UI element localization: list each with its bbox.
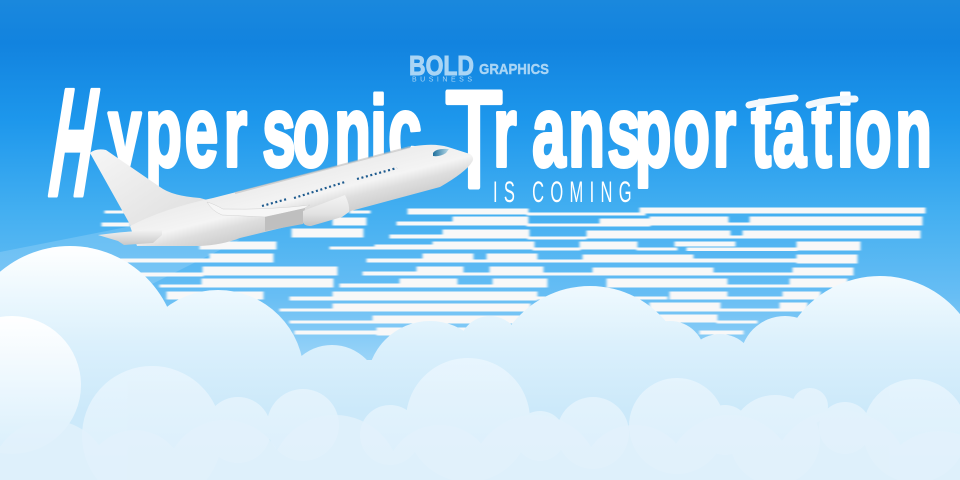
- contrail: [0, 226, 240, 330]
- subtitle: is coming: IS COMING: [493, 176, 632, 209]
- logo: Bold Business Graphics: BUSINESS: [412, 76, 472, 84]
- title: Hypersonic Transportation: H: [40, 58, 108, 228]
- wing: [207, 202, 310, 217]
- cabin windows: [262, 168, 397, 206]
- engine: [303, 195, 349, 226]
- title: Hypersonic Transportation: ransportation: [493, 76, 932, 188]
- tail fin: [90, 149, 225, 236]
- striped word behind the plane: [100, 208, 925, 335]
- cloud bank: back layer: [0, 246, 960, 480]
- airplane: [90, 145, 473, 246]
- logo: Bold Business Graphics: GRAPHICS: [479, 61, 549, 78]
- title: Hypersonic Transportation: [40, 58, 932, 228]
- title: Hypersonic Transportation: T: [445, 64, 503, 217]
- engine pylon: [265, 208, 305, 231]
- cockpit window: [433, 149, 449, 156]
- title: Hypersonic Transportation: ypersonic: [108, 76, 422, 188]
- horizontal stabilizer: [98, 230, 162, 245]
- title crossbars on the tall t letters: [749, 98, 855, 105]
- logo: Bold Business Graphics: [409, 50, 549, 84]
- cloud bank: front layer: [0, 316, 960, 480]
- fuselage: [130, 145, 473, 246]
- fuselage top shading: [235, 147, 410, 193]
- logo: Bold Business Graphics: BOLD: [409, 50, 474, 81]
